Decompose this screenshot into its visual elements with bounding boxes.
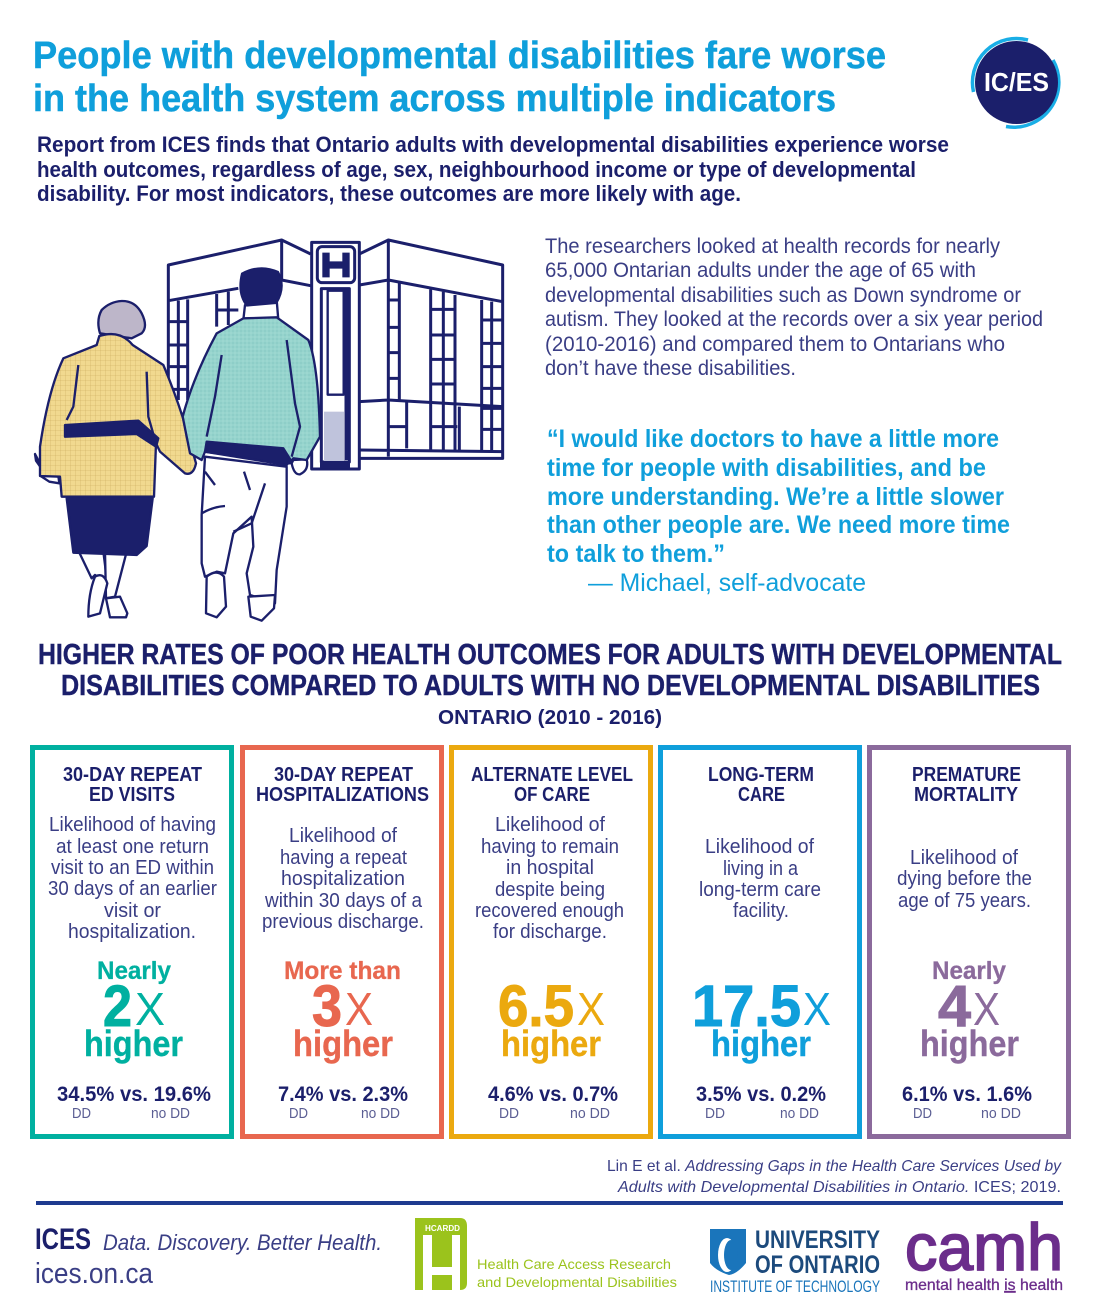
card description: in hospital xyxy=(506,857,594,879)
hospital building xyxy=(168,240,503,469)
big stat: More than xyxy=(284,957,401,985)
card description: hospitalization. xyxy=(68,921,196,943)
body text: study description xyxy=(545,235,1043,380)
card title xyxy=(471,764,633,806)
card title xyxy=(912,764,1021,806)
quote: time for people with disabilities, and be xyxy=(547,454,986,482)
comparison figures: 6.1% vs. 1.6% xyxy=(902,1083,1032,1106)
illustration: couple walking toward hospital xyxy=(35,240,503,621)
card description: visit to an ED within xyxy=(51,857,214,879)
card description: at least one return xyxy=(56,836,209,858)
comparison figures xyxy=(488,1083,618,1122)
big stat: 6.5 xyxy=(498,974,574,1039)
body text: study description: (2010-2016) and compared them to Ontarians who xyxy=(545,333,1005,356)
card title: HOSPITALIZATIONS xyxy=(256,784,429,806)
card description: Likelihood of xyxy=(495,814,605,836)
big stat: 4 xyxy=(938,974,971,1039)
big stat: X xyxy=(135,983,165,1035)
card title: ALTERNATE LEVEL xyxy=(471,764,633,786)
quote: “I would like doctors to have a little more xyxy=(547,425,999,453)
card description: having to remain xyxy=(481,836,619,858)
quote: — Michael, self-advocate xyxy=(588,569,866,597)
citation: Lin E et al. Addressing Gaps in the Health Care Services Used by xyxy=(607,1158,1062,1175)
comparison figures: 7.4% vs. 2.3% xyxy=(278,1083,408,1106)
subheading intro: Report from ICES finds that Ontario adults with developmental disabilities experience worse xyxy=(37,132,949,157)
big stat: 3 xyxy=(312,974,342,1039)
card description xyxy=(897,847,1032,912)
comparison figures: DD xyxy=(72,1105,91,1122)
card description: Likelihood of xyxy=(705,836,814,858)
big stat: X xyxy=(345,983,373,1035)
big stat: X xyxy=(577,983,605,1035)
footer: ICES tagline and URL: Data. Discovery. Better Health. xyxy=(103,1230,382,1255)
panel: alternate level of care xyxy=(452,748,650,1136)
card description xyxy=(48,814,217,943)
man xyxy=(183,268,320,621)
panel: long-term care xyxy=(660,748,860,1136)
title: in the health system across multiple indicators xyxy=(33,78,836,120)
card description: hospitalization xyxy=(281,868,405,890)
big stat xyxy=(498,974,605,1064)
quote: more understanding. We’re a little slower xyxy=(547,483,1004,511)
card description: long-term care xyxy=(699,879,821,901)
footer: ICES tagline and URL xyxy=(35,1223,382,1290)
big stat xyxy=(692,974,831,1064)
logo: University of Ontario Institute of Technology: OF ONTARIO xyxy=(755,1251,880,1279)
comparison figures: no DD xyxy=(981,1105,1021,1122)
citation xyxy=(607,1158,1062,1196)
quote: to talk to them.” xyxy=(547,540,725,568)
comparison figures xyxy=(902,1083,1032,1122)
logo: HCARDD: HCARDD xyxy=(425,1224,460,1233)
card description: previous discharge. xyxy=(262,911,424,933)
section heading xyxy=(38,639,1062,729)
card title xyxy=(256,764,429,806)
comparison figures: DD xyxy=(499,1105,519,1122)
comparison figures: no DD xyxy=(780,1105,819,1122)
title xyxy=(33,35,886,120)
citation: Adults with Developmental Disabilities in Ontario. ICES; 2019. xyxy=(617,1179,1061,1196)
logo: University of Ontario Institute of Technology: INSTITUTE OF TECHNOLOGY xyxy=(710,1277,880,1296)
card description: despite being xyxy=(495,879,605,901)
comparison figures: DD xyxy=(289,1105,308,1122)
logo: camh: camh xyxy=(905,1210,1063,1284)
card description: visit or xyxy=(104,900,161,922)
card title: CARE xyxy=(738,784,785,806)
card title: PREMATURE xyxy=(912,764,1021,786)
card title: 30-DAY REPEAT xyxy=(63,764,202,786)
footer: ICES tagline and URL: ices.on.ca xyxy=(35,1258,154,1290)
section heading: ONTARIO (2010 - 2016) xyxy=(438,707,662,729)
big stat xyxy=(84,957,183,1064)
card title xyxy=(708,764,814,806)
card description: age of 75 years. xyxy=(898,890,1031,912)
big stat: X xyxy=(803,983,831,1035)
big stat: Nearly xyxy=(932,957,1006,985)
card description xyxy=(262,825,424,933)
body text: study description: autism. They looked at the records over a six year period xyxy=(545,308,1043,331)
card description: for discharge. xyxy=(493,921,607,943)
comparison figures: DD xyxy=(913,1105,932,1122)
subheading intro: health outcomes, regardless of age, sex, neighbourhood income or type of developmental xyxy=(37,157,916,182)
comparison figures: no DD xyxy=(151,1105,190,1122)
logo: HCARDD xyxy=(415,1218,677,1290)
subheading intro xyxy=(37,132,949,206)
comparison figures: DD xyxy=(705,1105,725,1122)
comparison figures: 34.5% vs. 19.6% xyxy=(57,1083,211,1106)
big stat: X xyxy=(973,983,1000,1035)
big stat: 2 xyxy=(103,974,132,1039)
comparison figures xyxy=(696,1083,826,1122)
card description xyxy=(699,836,821,922)
card description: Likelihood of xyxy=(910,847,1018,869)
card title xyxy=(63,764,202,806)
subheading intro: disability. For most indicators, these outcomes are more likely with age. xyxy=(37,181,741,206)
panel: 30-day repeat hospitalizations xyxy=(242,748,442,1136)
body text: study description: developmental disabilities such as Down syndrome or xyxy=(545,284,1021,307)
body text: study description: 65,000 Ontarian adults under the age of 65 with xyxy=(545,259,976,282)
icon: IC/ES logo xyxy=(972,38,1059,127)
card description xyxy=(475,814,624,943)
title: People with developmental disabilities fare worse xyxy=(33,35,886,77)
logo: camh: mental health is health xyxy=(905,1277,1063,1294)
card description: living in a xyxy=(723,858,799,880)
panel: 30-day repeat ED visits xyxy=(32,748,232,1136)
big stat: 17.5 xyxy=(692,974,801,1039)
footer: ICES tagline and URL: ICES xyxy=(35,1223,91,1256)
body text: study description: The researchers looked at health records for nearly xyxy=(545,235,1000,258)
comparison figures: no DD xyxy=(361,1105,400,1122)
card title: ED VISITS xyxy=(89,784,175,806)
logo: HCARDD: and Developmental Disabilities xyxy=(477,1274,677,1290)
big stat: Nearly xyxy=(97,957,171,985)
card description: Likelihood of having xyxy=(49,814,216,836)
card description: facility. xyxy=(733,900,789,922)
big stat: higher xyxy=(293,1023,393,1064)
comparison figures: 4.6% vs. 0.7% xyxy=(488,1083,618,1106)
card description: recovered enough xyxy=(475,900,624,922)
big stat: higher xyxy=(501,1023,601,1064)
card title: LONG-TERM xyxy=(708,764,814,786)
big stat: higher xyxy=(84,1023,183,1064)
card title: OF CARE xyxy=(514,784,590,806)
comparison figures: no DD xyxy=(570,1105,610,1122)
big stat xyxy=(284,957,401,1064)
big stat: higher xyxy=(711,1023,811,1064)
big stat xyxy=(920,957,1019,1064)
comparison figures: 3.5% vs. 0.2% xyxy=(696,1083,826,1106)
body text: study description: don’t have these disabilities. xyxy=(545,357,796,380)
panel: premature mortality xyxy=(870,748,1068,1136)
woman xyxy=(35,301,196,617)
big stat: higher xyxy=(920,1023,1019,1064)
card title: MORTALITY xyxy=(914,784,1019,806)
logo: University of Ontario Institute of Technology: UNIVERSITY xyxy=(755,1226,880,1254)
card description: Likelihood of xyxy=(289,825,397,847)
comparison figures xyxy=(278,1083,408,1122)
card description: dying before the xyxy=(897,868,1032,890)
quote: than other people are. We need more time xyxy=(547,511,1010,539)
logo: University of Ontario Institute of Technology xyxy=(710,1226,880,1296)
card title: 30-DAY REPEAT xyxy=(274,764,413,786)
icon: IC/ES logo: IC/ES xyxy=(984,67,1049,97)
card description: having a repeat xyxy=(280,847,407,869)
logo: HCARDD: Health Care Access Research xyxy=(477,1256,671,1272)
comparison figures xyxy=(57,1083,211,1122)
quote xyxy=(547,425,1010,597)
card description: within 30 days of a xyxy=(264,890,423,912)
card description: 30 days of an earlier xyxy=(48,878,217,900)
